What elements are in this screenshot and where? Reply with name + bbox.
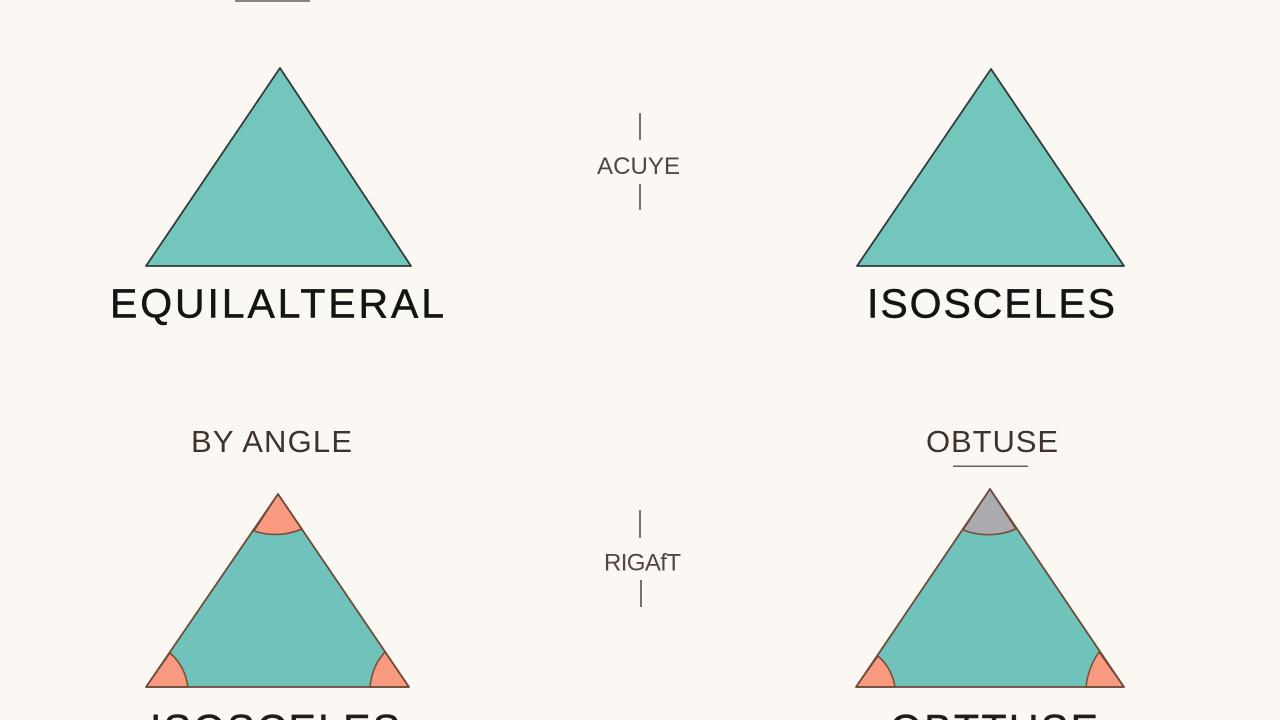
label: isosceles: ISOSCELES — [867, 280, 1115, 326]
triangle outline — [856, 489, 1124, 687]
heading: by angle: BY ANGLE — [191, 424, 352, 459]
top angle marker — [963, 489, 1016, 535]
triangle body — [856, 489, 1124, 687]
panel: by angle triangle — [146, 494, 409, 687]
left angle marker — [856, 656, 895, 687]
center label: right — [604, 510, 681, 607]
label: equilateral: EQUILALTERAL — [110, 280, 444, 326]
center label: acute — [597, 113, 680, 210]
triangle outline — [146, 494, 409, 687]
panel: obtuse triangle — [856, 489, 1124, 687]
top heading underline — [235, 0, 310, 2]
right angle marker — [370, 652, 409, 687]
top angle marker — [254, 494, 302, 535]
panel: isosceles — [857, 69, 1124, 326]
heading: obtuse: OBTUSE — [926, 424, 1058, 459]
panel: equilateral — [110, 68, 444, 326]
center label: acute: ACUYE — [597, 153, 680, 180]
left angle marker — [146, 653, 188, 687]
triangle: equilateral — [146, 68, 411, 266]
right angle marker — [1086, 652, 1124, 687]
center label: right: RIGAfT — [604, 550, 681, 576]
triangle body — [146, 494, 409, 687]
triangle: isosceles — [857, 69, 1124, 266]
obtuse heading underline — [953, 466, 1028, 467]
